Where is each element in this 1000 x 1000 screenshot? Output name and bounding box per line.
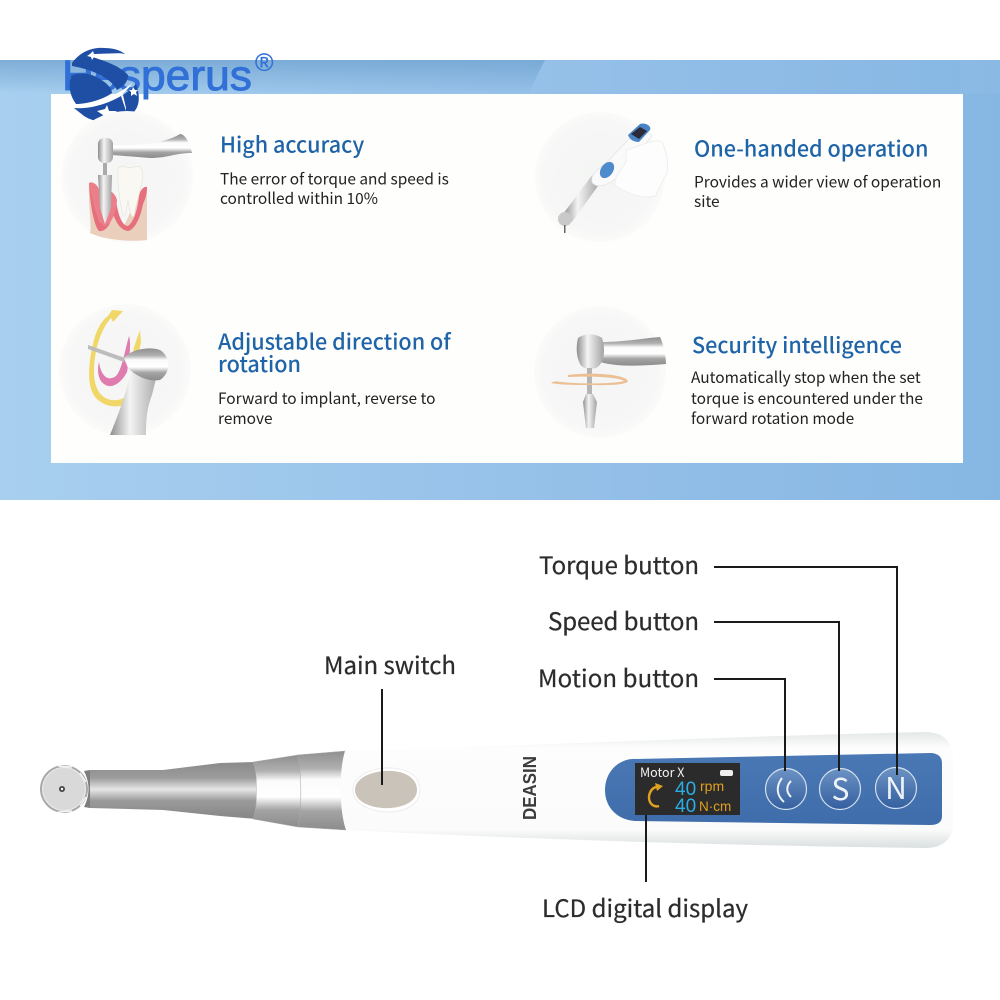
leader: torque button — [714, 567, 897, 775]
leader: main switch — [381, 689, 383, 785]
speed button — [820, 765, 860, 810]
heading: security intelligence: Security intelligence — [692, 329, 902, 360]
brand mark: DEASIN — [520, 756, 540, 820]
logo globe — [63, 48, 139, 123]
label: lcd display: LCD digital display — [542, 889, 748, 924]
handpiece neck — [90, 762, 256, 819]
feature: one-handed operation — [535, 112, 941, 242]
heading: adjustable direction: rotation — [218, 348, 301, 379]
control panel — [605, 753, 942, 825]
speed button: S — [832, 765, 849, 809]
description: security intelligence: Automatically stop when the set — [691, 366, 921, 388]
callout: torque button — [539, 546, 897, 775]
description: adjustable direction: Forward to implant, reverse to — [218, 387, 435, 409]
device: contra-angle handpiece — [40, 732, 953, 848]
lcd display: rpm — [700, 778, 724, 794]
n button: N — [885, 764, 907, 808]
label: torque button: Torque button — [539, 546, 699, 581]
blue background band — [0, 60, 1000, 500]
lcd display: Motor X — [640, 762, 684, 781]
n button — [876, 764, 916, 808]
icon: handpiece with bur and orange orbit — [534, 306, 666, 438]
label: motion button: Motion button — [538, 659, 699, 694]
callout: main switch — [324, 646, 456, 785]
lcd display — [635, 762, 740, 817]
description: high accuracy: controlled within 10% — [220, 187, 378, 209]
logo: Hesperus — [62, 48, 274, 123]
label: speed button: Speed button — [548, 602, 699, 637]
heading: one-handed operation: One-handed operation — [694, 132, 928, 164]
lcd display: 40 — [675, 779, 696, 800]
description: one-handed operation: site — [694, 190, 720, 212]
heading: high accuracy: High accuracy — [220, 128, 364, 160]
callout: speed button — [548, 602, 839, 771]
motion button — [766, 768, 806, 810]
heading: adjustable direction: Adjustable direction of — [218, 326, 452, 356]
description: adjustable direction: remove — [218, 407, 272, 429]
description: security intelligence: torque is encountered under the — [691, 387, 923, 409]
description: high accuracy: The error of torque and speed is — [220, 168, 449, 190]
description: security intelligence: forward rotation mode — [691, 407, 854, 429]
handpiece collar — [253, 755, 301, 827]
feature: high accuracy — [61, 111, 449, 243]
leader: speed button — [714, 622, 839, 771]
icon: handpiece with implant and tooth — [61, 111, 193, 243]
leader: lcd display — [645, 815, 647, 882]
feature: adjustable direction — [59, 304, 452, 436]
description: one-handed operation: Provides a wider view of operation — [694, 170, 941, 192]
feature: security intelligence — [534, 306, 923, 438]
icon: hand holding handpiece — [535, 112, 668, 242]
handpiece collar rear — [297, 751, 346, 830]
lcd display: N·cm — [699, 799, 731, 814]
leader: motion button — [714, 679, 785, 771]
callout: motion button — [538, 659, 785, 771]
icon: rotation arrows with handpiece — [59, 304, 191, 436]
white feature panel — [51, 94, 963, 463]
handle body — [341, 732, 953, 848]
logo registered mark: ® — [255, 49, 274, 77]
handpiece head — [40, 765, 90, 813]
lcd display: 40 — [675, 796, 696, 817]
main switch button — [353, 768, 420, 812]
logo wordmark: Hesperus — [62, 52, 252, 100]
label: main switch: Main switch — [324, 646, 456, 681]
